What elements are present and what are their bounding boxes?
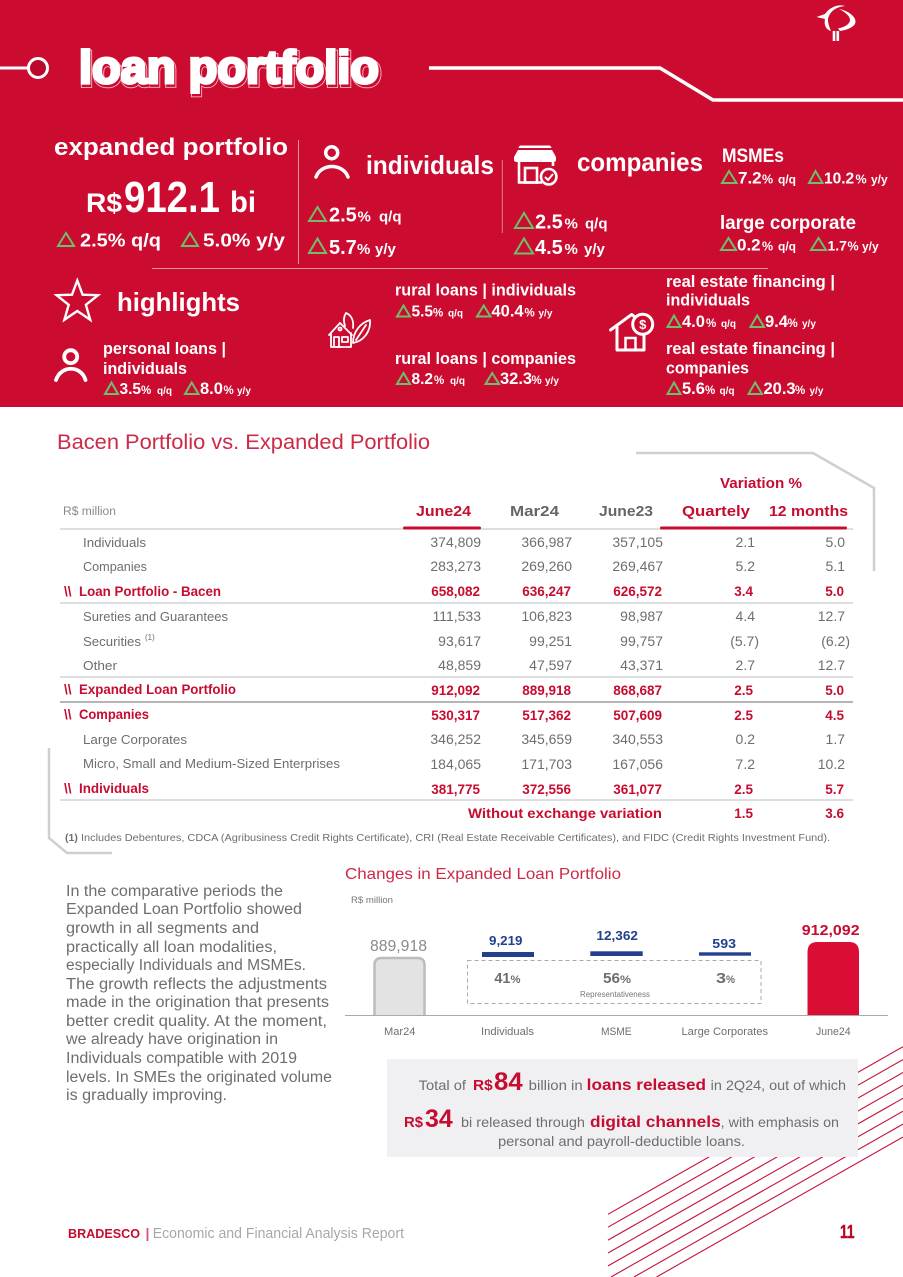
callout: loans released: Total of: [419, 1077, 466, 1093]
row: Individuals: 374,809: [430, 534, 481, 550]
row: Expanded Loan Portfolio: 5.0: [825, 683, 844, 698]
icon: bank logo: [816, 5, 856, 41]
row: Individuals total: 372,556: [522, 782, 571, 797]
metric: 5.7% y/y: y/y: [375, 241, 397, 258]
bar: Individuals: [482, 933, 534, 957]
metric: 5.7% y/y: 5.7: [329, 237, 357, 259]
metric: personal loans y/y: y/y: [237, 386, 251, 397]
axis labels: Large Corporates: [682, 1026, 769, 1038]
text block: commentary: The growth reflects the adjustments: [66, 976, 327, 993]
metric: large corporate q/q: 0.2: [737, 236, 761, 254]
row: Loan Portfolio - Bacen: Loan Portfolio - Bacen: [79, 584, 221, 599]
callout: loans released: digital channels: [590, 1114, 721, 1131]
metric: real estate individuals y/y: [750, 313, 816, 331]
metric: large corporate q/q: [721, 236, 796, 254]
row: Sureties and Guarantees: 98,987: [620, 608, 663, 624]
row: Companies: 283,273: [430, 558, 481, 574]
metric: MSMEs q/q: %: [762, 172, 773, 186]
callout: loans released: R$: [473, 1077, 493, 1094]
metric: real estate companies y/y: %: [795, 385, 805, 397]
row: Securities: [83, 633, 850, 649]
bar: Large Corporates: [699, 936, 751, 956]
metric: real estate companies q/q: %: [705, 385, 715, 397]
row: Large Corporates: Large Corporates: [83, 732, 188, 747]
row: Other: 47,597: [529, 657, 572, 673]
row: Companies total: [64, 707, 844, 723]
metric: 2.5% q/q: 2.5: [535, 212, 563, 234]
row: Companies total: 530,317: [431, 708, 480, 723]
metric: personal loans y/y: [185, 380, 251, 398]
title: loan portfolio: [80, 44, 381, 96]
callout: loans released: 34: [425, 1105, 453, 1133]
row: Sureties and Guarantees: Sureties and Guarantees: [83, 609, 228, 624]
row: Loan Portfolio - Bacen: 626,572: [613, 584, 662, 599]
panel: highlights: [56, 272, 835, 398]
text: rural loans companies: rural loans | companies: [395, 349, 576, 368]
row: Without exchange variation: 1.5: [734, 806, 753, 821]
text: personal loans individuals: personal loans |: [103, 339, 226, 358]
row: Individuals total: 5.7: [825, 782, 844, 797]
icon: star: [57, 280, 98, 320]
callout: loans released: R$: [404, 1114, 424, 1131]
text: real estate companies: real estate financing |: [666, 339, 835, 358]
row: Without exchange variation: [468, 806, 844, 821]
row: Companies: Companies: [83, 559, 147, 574]
row: Micro, Small and Medium-Sized Enterprises: 7.2: [736, 756, 755, 772]
metric: large corporate y/y: y/y: [862, 240, 879, 254]
callout: loans released: personal and payroll-deductible loans.: [498, 1133, 745, 1149]
row: Micro, Small and Medium-Sized Enterprises: 167,056: [612, 756, 663, 772]
row: Individuals: Individuals: [83, 535, 147, 550]
row: Loan Portfolio - Bacen: 636,247: [522, 584, 571, 599]
row: Individuals total: [64, 781, 844, 797]
metric: MSMEs y/y: y/y: [871, 172, 888, 186]
metric: large corporate y/y: 1.7: [828, 238, 847, 254]
icon: house with dollar: [610, 314, 653, 350]
row: Securities: Securities: [83, 634, 142, 649]
row: Other: 12.7: [818, 657, 845, 673]
text: real estate companies: [666, 339, 835, 378]
bar: Mar24: 889,918: [370, 938, 427, 955]
metric: real estate individuals y/y: y/y: [802, 319, 816, 330]
metric: large corporate y/y: %: [848, 240, 859, 254]
row: Other: 43,371: [620, 657, 663, 673]
metric: real estate individuals q/q: 4.0: [682, 313, 705, 331]
row: Individuals: 5.0: [826, 534, 845, 550]
metric: 2.5% q/q: %: [564, 216, 578, 232]
row: Individuals: 366,987: [521, 534, 572, 550]
callout: loans released: loans released: [587, 1077, 706, 1094]
row: Individuals total: 381,775: [431, 782, 480, 797]
row: Sureties and Guarantees: 106,823: [521, 608, 572, 624]
table header: Quartely: [682, 503, 751, 520]
row: Companies total: Companies: [79, 707, 149, 722]
footnote: Includes Debentures, CDCA (Agribusiness Credit Rights Certificate), CRI (Real Estate Receivable Certificates), and FIDC (Credit Rights Investment Fund).: [81, 832, 830, 844]
bar: MSME: 12,362: [596, 928, 638, 943]
callout: loans released: , with emphasis on: [721, 1114, 839, 1130]
callout: loans released: in 2Q24, out of which: [711, 1077, 846, 1093]
metric: rural companies q/q: q/q: [450, 376, 465, 387]
text block: commentary: levels. In SMEs the originated volume: [66, 1069, 332, 1086]
heading: Bacen vs Expanded: Bacen Portfolio vs. Expanded Portfolio: [57, 431, 430, 454]
icon: house with dollar: $: [639, 317, 647, 332]
metric: rural companies q/q: %: [434, 375, 444, 387]
figure: R$912.1 bi: R$: [86, 188, 122, 218]
row: Expanded Loan Portfolio: Expanded Loan Portfolio: [79, 682, 236, 697]
row: Individuals total: 361,077: [613, 782, 662, 797]
text block: commentary: Expanded Loan Portfolio showed: [66, 901, 302, 918]
metric: 5.7% y/y: [309, 237, 397, 259]
footer: BRADESCO: [68, 1226, 140, 1241]
metric: MSMEs y/y: 10.2: [824, 170, 854, 188]
row: Expanded Loan Portfolio: 889,918: [522, 683, 571, 698]
axis labels: June24: [816, 1026, 851, 1038]
metric: rural individuals y/y: [477, 302, 553, 320]
axis labels: MSME: [601, 1026, 632, 1038]
row: Large Corporates: [83, 731, 845, 747]
table header: Mar24: [510, 503, 560, 520]
metric: 2.5% q/q: 2.5: [329, 204, 357, 226]
metric: real estate companies q/q: [668, 380, 734, 398]
row: Securities: 99,251: [529, 633, 572, 649]
metric: MSMEs q/q: [722, 168, 796, 188]
text: personal loans individuals: individuals: [103, 359, 187, 378]
header rule: [429, 68, 903, 100]
metric: rural companies y/y: [486, 370, 559, 388]
metric: 4.5% y/y: [515, 237, 606, 259]
table header: June24: [416, 503, 472, 520]
metric: real estate companies q/q: 5.6: [682, 380, 705, 398]
table header: June23: [599, 503, 653, 520]
text block: commentary: practically all loan modalities,: [66, 939, 277, 956]
row: Securities: 93,617: [438, 633, 481, 649]
row: Securities: (5.7): [730, 633, 759, 649]
row: Expanded Loan Portfolio: [64, 682, 844, 698]
figure: R$912.1 bi: bi: [230, 186, 256, 219]
callout: loans released: 84: [494, 1068, 523, 1096]
title: loan portfolio: [80, 44, 381, 96]
metric: rural individuals q/q: %: [433, 308, 443, 320]
box: representativeness: 41: [494, 970, 510, 987]
bar: June24: [802, 922, 860, 1015]
chart: loan portfolio changes: R$ million: [351, 895, 393, 906]
text block: commentary: Individuals compatible with 2019: [66, 1050, 297, 1067]
callout: loans released: [387, 1059, 858, 1157]
axis labels: [384, 1026, 851, 1038]
row: Other: 2.7: [736, 657, 755, 673]
heading: companies: companies: [577, 147, 703, 177]
row: Loan Portfolio - Bacen: \\: [64, 584, 72, 599]
panel: expanded portfolio: [54, 134, 288, 250]
axis labels: Mar24: [384, 1026, 415, 1038]
box: representativeness: Representativeness: [580, 990, 650, 999]
metric: 4.5% y/y: %: [564, 241, 578, 258]
metric: 5.0% y/y: [182, 230, 285, 250]
text: real estate individuals: [666, 272, 835, 310]
icon: store: [514, 146, 556, 184]
text: real estate companies: companies: [666, 358, 749, 378]
row: Companies: 5.1: [826, 558, 845, 574]
metric: MSMEs q/q: 7.2: [738, 168, 762, 188]
panel: individuals: [309, 147, 494, 259]
metric: personal loans q/q: %: [141, 385, 151, 397]
row: Large Corporates: 345,659: [521, 731, 572, 747]
row: Securities: (6.2): [821, 633, 850, 649]
metric: rural companies q/q: 8.2: [412, 371, 433, 388]
row: Micro, Small and Medium-Sized Enterprises: Micro, Small and Medium-Sized Enterprises: [83, 756, 340, 771]
callout: loans released: bi released through: [461, 1114, 585, 1130]
footer: |: [146, 1225, 149, 1241]
row: Companies total: 507,609: [613, 708, 662, 723]
row: Large Corporates: 0.2: [736, 731, 755, 747]
callout: loans released: billion in: [529, 1077, 583, 1093]
page number: 11: [840, 1222, 854, 1242]
metric: rural individuals y/y: y/y: [538, 308, 553, 320]
text block: commentary: growth in all segments and: [66, 920, 259, 937]
row: Expanded Loan Portfolio: 912,092: [431, 683, 480, 698]
row: Micro, Small and Medium-Sized Enterprises: 184,065: [430, 756, 481, 772]
figure: R$912.1 bi: 912.1: [124, 173, 220, 222]
metric: real estate companies y/y: y/y: [810, 386, 824, 397]
bar: Individuals: 9,219: [489, 933, 522, 948]
row: Sureties and Guarantees: 111,533: [432, 608, 481, 624]
metric: 2.5% q/q: %: [358, 208, 371, 226]
table: portfolio: [60, 476, 853, 821]
text block: commentary: better credit quality. At the moment,: [66, 1013, 327, 1030]
metric: 4.5% y/y: 4.5: [535, 237, 563, 259]
icon: person: [316, 147, 348, 177]
footer: [68, 1222, 854, 1242]
text block: commentary: is gradually improving.: [66, 1087, 227, 1104]
row: Micro, Small and Medium-Sized Enterprises: 171,703: [521, 756, 572, 772]
metric: large corporate q/q: %: [762, 240, 773, 254]
metric: personal loans q/q: 3.5: [120, 381, 141, 398]
row: Companies total: 517,362: [522, 708, 571, 723]
row: Companies total: 4.5: [825, 708, 844, 723]
metric: real estate individuals q/q: [668, 313, 736, 331]
row: Large Corporates: 1.7: [826, 731, 845, 747]
metric: personal loans y/y: %: [224, 385, 234, 397]
metric: large corporate q/q: q/q: [778, 240, 796, 254]
text: real estate individuals: individuals: [666, 290, 750, 310]
metric: personal loans y/y: 8.0: [200, 380, 223, 398]
table header: R$ million: [63, 506, 116, 518]
footnote: (1): [65, 832, 78, 844]
table header: [63, 476, 848, 520]
text block: commentary: [65, 883, 332, 1104]
row: Securities: (1): [145, 633, 155, 642]
bar: June24: 912,092: [802, 922, 860, 939]
metric: rural individuals y/y: 40.4: [492, 302, 524, 320]
heading: chart: Changes in Expanded Loan Portfolio: [345, 866, 621, 883]
text block: commentary: we already have origination in: [65, 1031, 278, 1048]
row: Expanded Loan Portfolio: \\: [64, 682, 72, 697]
text: real estate individuals: real estate financing |: [666, 272, 835, 291]
row: Companies: 269,467: [612, 558, 663, 574]
metric: rural individuals y/y: %: [524, 308, 535, 320]
metric: rural companies y/y: y/y: [545, 376, 559, 387]
metric: personal loans q/q: q/q: [157, 386, 172, 397]
text: personal loans individuals: [103, 339, 226, 378]
metric: 2.5% q/q: q/q: [379, 208, 402, 226]
heading: individuals: individuals: [366, 150, 494, 180]
row: Large Corporates: 346,252: [430, 731, 481, 747]
bar: Mar24: [370, 938, 427, 1015]
metric: rural individuals q/q: q/q: [448, 308, 463, 320]
metric: real estate companies y/y: 20.3: [764, 380, 796, 398]
box: representativeness: %: [620, 974, 631, 986]
metric: real estate individuals y/y: 9.4: [765, 313, 789, 331]
icon: person: [56, 350, 86, 380]
row: Individuals: 2.1: [736, 534, 755, 550]
row: Micro, Small and Medium-Sized Enterprises: [83, 756, 845, 772]
metric: personal loans q/q: [105, 381, 172, 398]
panel: companies: [514, 146, 888, 259]
metric: rural individuals q/q: 5.5: [412, 304, 433, 320]
row: Loan Portfolio - Bacen: 658,082: [431, 584, 480, 599]
table header: Variation %: [720, 476, 802, 492]
metric: 5.0% y/y: 5.0% y/y: [203, 230, 285, 250]
metric: 4.5% y/y: y/y: [584, 241, 606, 258]
metric: MSMEs q/q: q/q: [778, 172, 796, 186]
row: Other: 48,859: [438, 657, 481, 673]
box: representativeness: 3: [716, 970, 726, 987]
row: Large Corporates: 340,553: [612, 731, 663, 747]
row: Companies: 5.2: [736, 558, 755, 574]
box: representativeness: %: [726, 974, 735, 986]
decorative stripes: [608, 1047, 903, 1277]
text block: commentary: In the comparative periods the: [66, 883, 283, 900]
metric: rural companies y/y: 32.3: [500, 370, 532, 388]
row: Loan Portfolio - Bacen: 3.4: [734, 584, 753, 599]
row: Companies: 269,260: [521, 558, 572, 574]
metric: rural companies q/q: [397, 371, 465, 388]
metric: 5.7% y/y: %: [357, 241, 370, 258]
text: rural loans individuals: rural loans | individuals: [395, 280, 576, 300]
metric: MSMEs y/y: %: [856, 172, 867, 186]
figure: R$912.1 bi: [86, 173, 256, 222]
heading: MSMEs: MSMEs: [722, 146, 784, 167]
panel: red header: [0, 0, 903, 407]
row: Companies total: 2.5: [734, 708, 753, 723]
row: Loan Portfolio - Bacen: [64, 584, 844, 599]
heading: highlights: highlights: [117, 287, 240, 317]
row: Individuals: 357,105: [612, 534, 663, 550]
row: Micro, Small and Medium-Sized Enterprises: 10.2: [818, 756, 845, 772]
title: loan portfolio: [79, 41, 379, 93]
box: representativeness: [468, 960, 761, 1004]
metric: 2.5% q/q: [309, 204, 402, 226]
row: Other: Other: [83, 658, 118, 673]
metric: real estate companies y/y: [748, 380, 824, 398]
metric: 2.5% q/q: [515, 212, 608, 234]
row: Securities: 99,757: [620, 633, 663, 649]
row: Sureties and Guarantees: 12.7: [818, 608, 845, 624]
heading: expanded portfolio: expanded portfolio: [54, 134, 288, 161]
chart: loan portfolio changes: [345, 895, 888, 1038]
metric: real estate individuals y/y: %: [788, 318, 798, 330]
text block: commentary: especially Individuals and MSMEs.: [66, 957, 306, 974]
row: Other: [83, 657, 845, 673]
axis labels: Individuals: [481, 1026, 535, 1038]
metric: 2.5% q/q: 2.5% q/q: [80, 230, 161, 250]
row: Without exchange variation: 3.6: [825, 806, 844, 821]
bar: Large Corporates: 593: [712, 936, 736, 951]
row: Companies total: \\: [64, 707, 72, 722]
metric: 2.5% q/q: q/q: [585, 216, 608, 232]
row: Sureties and Guarantees: 4.4: [736, 608, 755, 624]
text block: commentary: made in the origination that presents: [66, 994, 329, 1011]
heading: large corporate: large corporate: [720, 213, 856, 234]
metric: real estate individuals q/q: %: [706, 318, 716, 330]
decorative line with circle: [0, 58, 48, 78]
metric: rural individuals q/q: [397, 304, 463, 320]
metric: real estate individuals q/q: q/q: [721, 319, 736, 330]
metric: real estate companies q/q: q/q: [720, 386, 734, 397]
box: representativeness: 56: [603, 970, 620, 987]
row: Companies: [83, 558, 845, 574]
row: Without exchange variation: Without exchange variation: [468, 806, 662, 821]
table header: 12 months: [769, 503, 848, 520]
footer: Economic and Financial Analysis Report: [153, 1226, 404, 1242]
row: Individuals: [83, 534, 845, 550]
row: Individuals total: 2.5: [734, 782, 753, 797]
metric: MSMEs y/y: [809, 170, 888, 188]
row: Individuals total: Individuals: [79, 781, 149, 796]
metric: rural companies y/y: %: [532, 375, 542, 387]
row: Loan Portfolio - Bacen: 5.0: [825, 584, 844, 599]
icon: rural house with leaves: [329, 313, 370, 347]
row: Sureties and Guarantees: [83, 608, 845, 624]
box: representativeness: %: [510, 974, 521, 986]
row: Expanded Loan Portfolio: 2.5: [734, 683, 753, 698]
row: Expanded Loan Portfolio: 868,687: [613, 683, 662, 698]
metric: large corporate y/y: [811, 238, 879, 254]
bar: MSME: [590, 928, 643, 956]
row: Individuals total: \\: [64, 781, 72, 796]
